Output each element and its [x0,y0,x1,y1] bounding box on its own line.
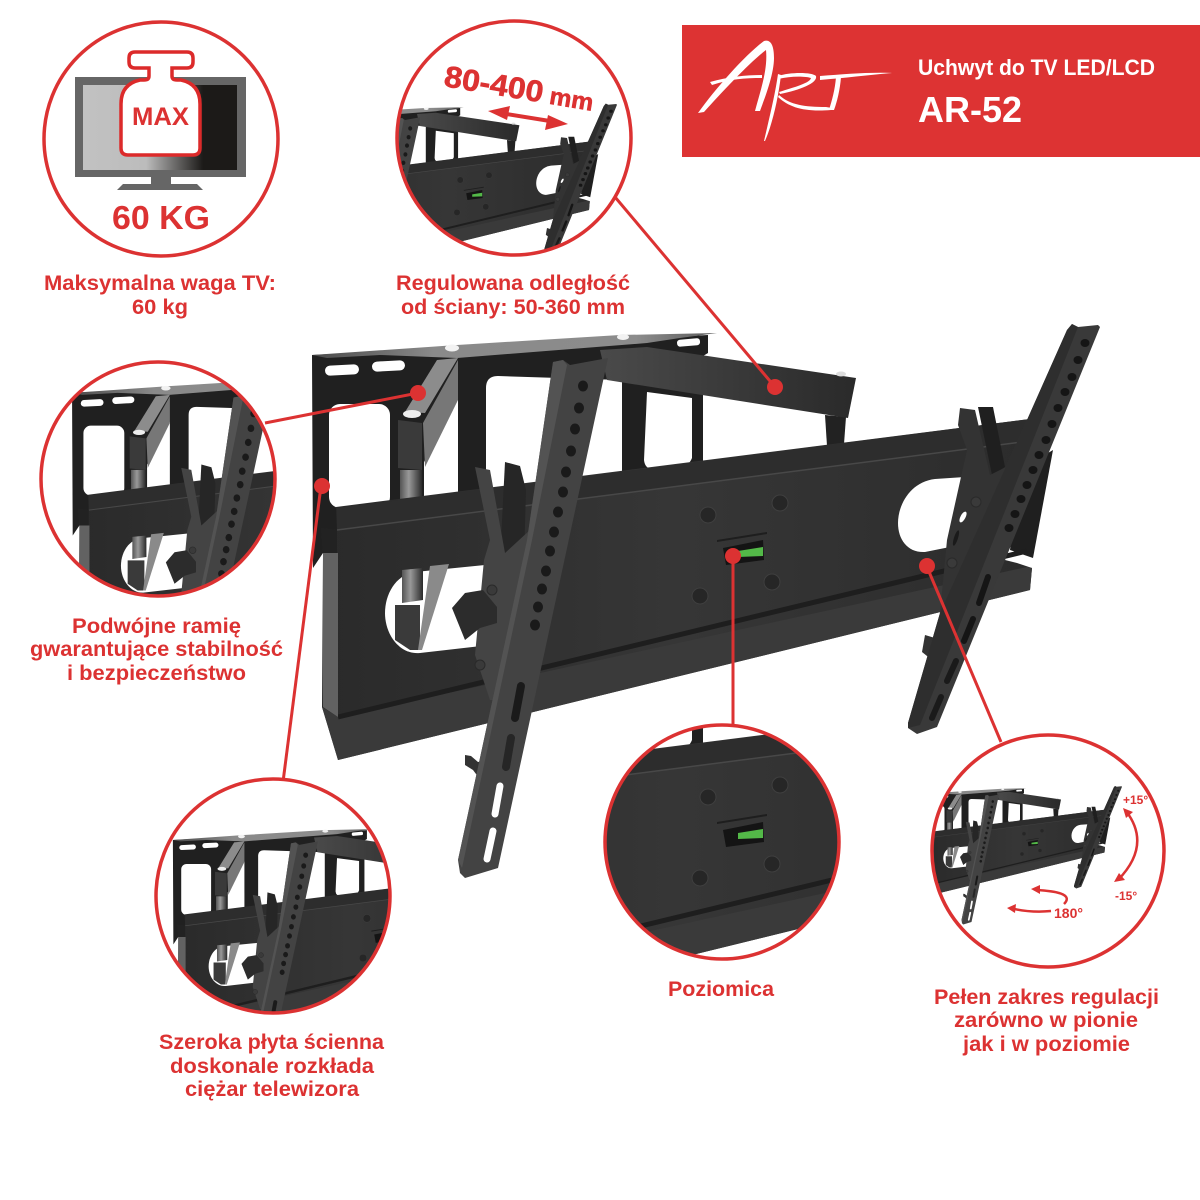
caption: full adjustment range [934,986,1159,1056]
caption: adjustable distance: od ściany: 50-360 mm [401,296,625,319]
rear bracket plate on the right [1010,450,1053,558]
caption: spirit level: Poziomica [668,978,774,1001]
mount close-up: right side [398,104,617,250]
left tilt bar [458,358,608,878]
distance value: 80-400 [442,60,546,109]
right tilt bar [908,324,1100,734]
panel: full adjustment range [925,735,1164,967]
wall plate [312,333,717,568]
caption: double arm: Podwójne ramię [72,615,241,638]
right arm [600,347,856,446]
icon: television [75,77,246,190]
mount close-up: level [606,728,838,954]
distance value [442,60,596,118]
left oval cut-out with arm behind [385,564,490,653]
caption: wide wall plate: ciężar telewizora [185,1078,359,1101]
banner model name: AR-52 [918,89,1022,130]
arrowheads: rotation range [1007,885,1040,913]
panel: adjustable distance [395,19,633,257]
callout leader lines [265,197,1001,782]
weight label: MAX [132,103,189,131]
caption: adjustable distance [396,272,630,319]
caption: full adjustment range: jak i w poziomie [962,1033,1130,1056]
header banner [682,25,1200,157]
left tilt bracket [452,462,530,790]
caption: wide wall plate [159,1031,384,1101]
arrow: distance [488,106,568,130]
caption: maximum weight: 60 kg [132,296,188,319]
spirit level [717,532,767,565]
caption: full adjustment range: Pełen zakres regulacji [934,986,1159,1009]
white area behind the arm [703,392,830,462]
caption: adjustable distance: Regulowana odległość [396,272,630,295]
caption: full adjustment range: zarówno w pionie [954,1009,1138,1032]
panel: wide wall plate [154,777,392,1015]
arrowheads: tilt range [1114,808,1133,882]
tilt up label: +15° [1123,793,1148,807]
callout anchor dots [314,379,935,574]
icon: weight [121,52,200,155]
left arm with rod [398,358,458,502]
arrow: rotation range [1010,890,1067,912]
arrow: tilt range [1118,811,1137,880]
panel: spirit level [603,723,841,961]
panel: maximum weight [44,22,278,256]
right tilt bracket [922,407,1040,660]
mount close-up: wall plate [172,829,388,1012]
main product: TV wall mount [312,324,1100,878]
tilt down label: -15° [1115,889,1137,903]
caption: maximum weight: Maksymalna waga TV: [44,272,276,295]
banner subtitle: Uchwyt do TV LED/LCD [918,55,1155,80]
caption: double arm: gwarantujące stabilność [30,638,283,661]
panel: double arm [39,360,277,598]
caption: maximum weight [44,272,276,319]
weight value: 60 KG [112,199,210,236]
caption: double arm [30,615,283,685]
right oval cut-out [898,477,965,552]
distance value: mm [548,83,595,117]
front plate [321,419,1032,760]
logo: ART [698,41,892,141]
mount close-up: left arm [72,383,274,594]
rotation label: 180° [1054,905,1083,921]
caption: wide wall plate: Szeroka płyta ścienna [159,1031,384,1054]
mounting bumps [692,495,788,604]
caption: double arm: i bezpieczeństwo [67,662,246,685]
mount overview [925,786,1122,924]
caption: wide wall plate: doskonale rozkłada [170,1055,374,1078]
